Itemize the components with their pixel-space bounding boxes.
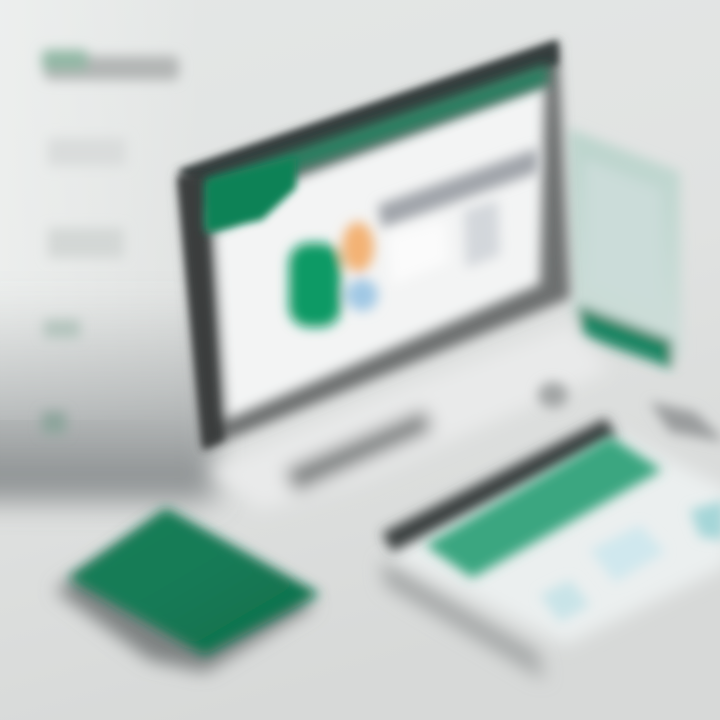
table columns — [388, 200, 500, 285]
phone — [55, 508, 320, 672]
desk highlight and stand base — [210, 325, 610, 510]
tablet green header — [425, 436, 662, 578]
header tab — [206, 157, 296, 232]
blue segment — [346, 279, 378, 311]
green segment — [289, 243, 341, 327]
tablet body — [385, 430, 720, 645]
monitor — [178, 40, 570, 450]
tablet cells — [540, 500, 720, 622]
heading block — [42, 50, 179, 80]
orange segment — [342, 222, 374, 272]
document panel behind monitor — [568, 128, 682, 368]
small device right — [538, 382, 720, 442]
phone screen — [68, 508, 320, 655]
tablet dark bar — [382, 418, 616, 552]
tablet — [382, 418, 720, 680]
screen — [212, 84, 545, 420]
document green footer — [578, 305, 672, 368]
monitor cast shadow — [0, 290, 215, 500]
list item 2 — [48, 228, 124, 258]
frame left edge — [178, 176, 224, 450]
tablet lower edge — [382, 560, 545, 680]
stand slot — [285, 410, 432, 492]
list item 3 — [44, 320, 80, 338]
pie chart — [289, 222, 378, 327]
monitor frame — [178, 42, 570, 450]
list item 4 — [42, 412, 66, 434]
phone shadow — [55, 520, 315, 672]
frame top edge — [178, 40, 558, 190]
sidebar: heading and text list — [42, 50, 179, 434]
list item 1 — [48, 138, 126, 166]
toolbar grey row — [378, 148, 538, 228]
screen header band — [206, 64, 548, 232]
